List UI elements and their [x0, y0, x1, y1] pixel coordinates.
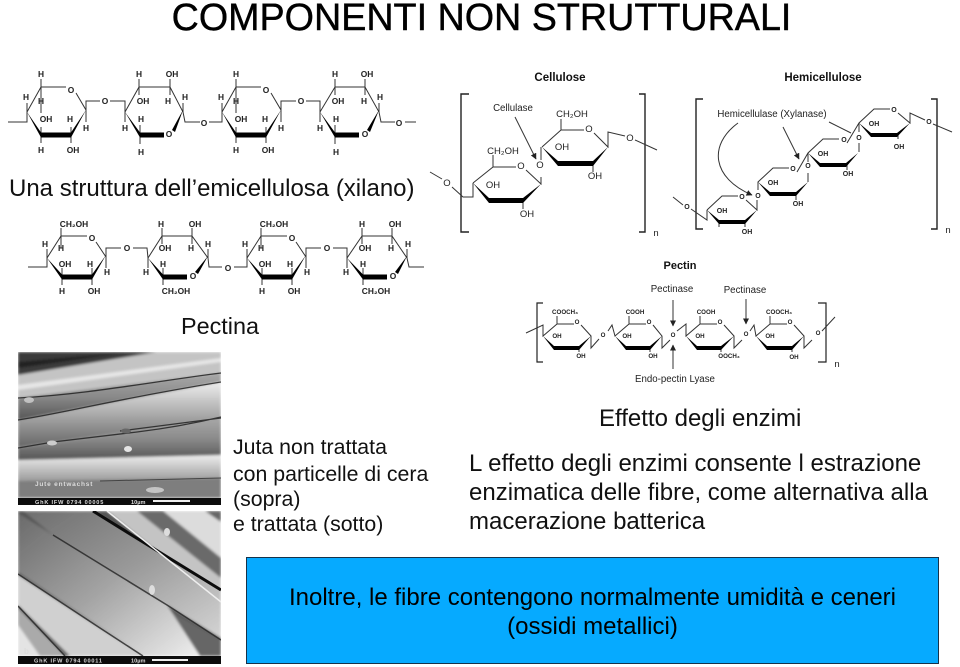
chemical structure: pectina chain: OH — [288, 286, 300, 296]
diagram: hemicellulose: O — [790, 166, 796, 173]
chemical structure: pectina chain: OH — [59, 259, 71, 269]
diagram: pectin: O — [671, 332, 676, 339]
chemical structure: xylan chain: H — [122, 123, 128, 133]
chemical structure: pectina chain: H — [287, 259, 293, 269]
chemical structure: xylan chain: O — [298, 96, 305, 106]
chemical structure: xylan chain: H — [38, 145, 44, 155]
chemical structure: pectina chain: CH₂OH — [162, 286, 190, 296]
chemical structure: pectina chain: H — [258, 243, 264, 253]
diagram: hemicellulose: OH — [869, 121, 879, 128]
chemical structure: pectina chain: H — [188, 243, 194, 253]
photo: jute treated — [18, 511, 221, 664]
diagram: pectin: OH — [576, 353, 586, 360]
chemical structure: pectina chain: CH₂OH — [362, 286, 390, 296]
diagram: pectin: OOCH₃ — [718, 353, 740, 360]
diagram: pectin: COOH — [626, 309, 645, 316]
text block: enzyme extraction: enzimatica delle fibre, come alternativa alla — [469, 479, 929, 506]
chemical structure: xylan chain: O — [166, 129, 173, 139]
diagram: hemicellulose: O — [755, 193, 761, 200]
caption: jute photos: (sopra) — [233, 487, 300, 511]
chemical structure: pectina chain: O — [89, 233, 96, 243]
chemical structure: xylan chain: H — [38, 69, 44, 79]
chemical structure: xylan chain: O — [396, 118, 403, 128]
chemical structure: pectina chain: OH — [88, 286, 100, 296]
chemical structure: pectina chain — [28, 219, 424, 296]
chemical structure: pectina chain: O — [289, 233, 296, 243]
caption: jute photos: e trattata (sotto) — [233, 512, 383, 536]
chemical structure: xylan chain: H — [83, 123, 89, 133]
diagram: pectin: Pectinase — [651, 284, 693, 295]
photo: jute untreated: Jute entwachst — [35, 481, 93, 488]
chemical structure: pectina chain: OH — [259, 259, 271, 269]
chemical structure: xylan chain: OH — [166, 69, 178, 79]
diagram: cellulose: O — [443, 178, 451, 189]
diagram: cellulose: OH — [555, 142, 569, 153]
caption: jute photos: Juta non trattata — [233, 435, 387, 459]
diagram: pectin: Pectin — [663, 260, 697, 272]
diagram: cellulose — [430, 72, 659, 239]
diagram: cellulose: O — [536, 160, 544, 171]
diagram: hemicellulose: OH — [793, 201, 803, 208]
diagram: cellulose: OH — [520, 209, 534, 220]
chemical structure: xylan chain: H — [278, 123, 284, 133]
heading: enzyme effect: Effetto degli enzimi — [599, 405, 801, 432]
diagram: cellulose: O — [585, 124, 593, 135]
diagram: hemicellulose: OH — [768, 180, 778, 187]
chemical structure: xylan chain: O — [263, 85, 270, 95]
diagram: hemicellulose: O — [841, 137, 847, 144]
photo: jute untreated: GhK IFW 0794 00005 — [35, 500, 104, 506]
chemical structure: xylan chain: H — [218, 92, 224, 102]
diagram: pectin: OH — [648, 353, 658, 360]
diagram: pectin: OH — [789, 354, 799, 361]
chemical structure: xylan chain: H — [332, 69, 338, 79]
chemical structure: pectina chain: H — [304, 267, 310, 277]
diagram: pectin: OH — [552, 333, 562, 340]
chemical structure: pectina chain: OH — [189, 219, 201, 229]
diagram: hemicellulose: O — [684, 204, 690, 211]
diagram: hemicellulose: O — [739, 194, 745, 201]
diagram: pectin: n — [834, 359, 840, 370]
diagram: pectin: COOH — [697, 309, 716, 316]
chemical structure: xylan chain: O — [102, 96, 109, 106]
diagram: pectin — [526, 260, 840, 385]
caption: xylan: Una struttura dell’emicellulosa (xilano) — [9, 175, 415, 202]
chemical structure: xylan chain: O — [201, 118, 208, 128]
chemical structure: pectina chain: O — [390, 271, 397, 281]
diagram: pectin: COOCH₃ — [766, 309, 792, 316]
chemical structure: xylan chain: O — [68, 85, 75, 95]
chemical structure: pectina chain: OH — [389, 219, 401, 229]
diagram: cellulose: n — [653, 228, 659, 239]
chemical structure: xylan chain: H — [38, 96, 44, 106]
chemical structure: pectina chain: H — [87, 259, 93, 269]
chemical structure: pectina chain: H — [405, 239, 411, 249]
chemical structure: pectina chain: H — [104, 267, 110, 277]
diagram: pectin: O — [718, 319, 723, 326]
callout: humidity and ash: Inoltre, le fibre contengono normalmente umidità e ceneri — [289, 584, 896, 611]
diagram: cellulose: Cellulose — [534, 72, 586, 84]
chemical structure: xylan chain: H — [165, 96, 171, 106]
diagram: hemicellulose: O — [856, 135, 862, 142]
diagram: hemicellulose: Hemicellulase (Xylanase) — [717, 109, 827, 120]
photo: jute untreated — [18, 352, 221, 506]
chemical structure: pectina chain: O — [124, 243, 131, 253]
diagram: pectin: O — [788, 319, 793, 326]
diagram: hemicellulose: O — [926, 119, 932, 126]
diagram: cellulose: O — [517, 161, 525, 172]
chemical structure: pectina chain: H — [242, 239, 248, 249]
diagram: hemicellulose: OH — [742, 229, 752, 236]
diagram: hemicellulose: Hemicellulose — [784, 72, 862, 84]
chemical structure: pectina chain: H — [59, 286, 65, 296]
text block: enzyme extraction: L effetto degli enzimi consente l estrazione — [469, 450, 921, 477]
diagram: cellulose: CH₂OH — [556, 109, 588, 120]
chemical structure: pectina chain: H — [388, 243, 394, 253]
chemical structure: xylan chain: H — [233, 145, 239, 155]
chemical structure: pectina chain: H — [360, 259, 366, 269]
photo: jute treated: b — [24, 647, 29, 656]
chemical structure: xylan chain: OH — [361, 69, 373, 79]
chemical structure: xylan chain: H — [333, 147, 339, 157]
diagram: cellulose: O — [626, 133, 634, 144]
chemical structure: xylan chain: H — [23, 92, 29, 102]
diagram: cellulose: Cellulase — [493, 103, 533, 114]
chemical structure: pectina chain: CH₂OH — [260, 219, 288, 229]
chemical structure: xylan chain: OH — [235, 114, 247, 124]
diagram: pectin: O — [601, 332, 606, 339]
diagram: pectin: COOCH₃ — [552, 309, 578, 316]
photo: jute treated: GhK IFW 0794 00011 — [34, 658, 103, 664]
chemical structure: xylan chain: H — [233, 96, 239, 106]
photo: jute treated: 10µm — [131, 658, 145, 664]
diagram: pectin: O — [816, 330, 821, 337]
text block: enzyme extraction — [469, 450, 929, 535]
chemical structure: pectina chain: H — [343, 267, 349, 277]
diagram: pectin: O — [575, 319, 580, 326]
chemical structure: xylan chain — [8, 69, 416, 157]
chemical structure: xylan chain: H — [136, 69, 142, 79]
chemical structure: xylan chain: H — [182, 92, 188, 102]
diagram: pectin: Endo-pectin Lyase — [635, 374, 715, 385]
chemical structure: pectina chain: H — [58, 243, 64, 253]
diagram: hemicellulose: O — [891, 107, 897, 114]
chemical structure: pectina chain: H — [259, 286, 265, 296]
chemical structure: pectina chain: H — [205, 239, 211, 249]
diagram: hemicellulose: O — [805, 163, 811, 170]
chemical structure: pectina chain: OH — [159, 243, 171, 253]
chemical structure: pectina chain: H — [42, 239, 48, 249]
chemical structure: pectina chain: H — [160, 259, 166, 269]
caption: pectina: Pectina — [181, 313, 260, 339]
chemical structure: xylan chain: OH — [262, 145, 274, 155]
chemical structure: pectina chain: H — [143, 267, 149, 277]
diagram: hemicellulose: n — [945, 225, 951, 236]
diagram: pectin: OH — [695, 333, 705, 340]
chemical structure: xylan chain: H — [377, 92, 383, 102]
chemical structure: xylan chain: H — [233, 69, 239, 79]
photo: jute untreated: 10µm — [131, 500, 145, 506]
chemical structure: xylan chain: OH — [137, 96, 149, 106]
chemical structure: pectina chain: CH₂OH — [60, 219, 88, 229]
callout: humidity and ash: (ossidi metallici) — [507, 613, 678, 640]
diagram: hemicellulose: OH — [843, 171, 853, 178]
chemical structure: pectina chain: H — [359, 219, 365, 229]
diagram: hemicellulose: OH — [818, 151, 828, 158]
diagram: pectin: O — [647, 319, 652, 326]
chemical structure: xylan chain: H — [67, 114, 73, 124]
caption: jute photos — [233, 435, 428, 536]
chemical structure: xylan chain: OH — [332, 96, 344, 106]
chemical structure: xylan chain: H — [333, 114, 339, 124]
diagram: cellulose: OH — [486, 180, 500, 191]
chemical structure: xylan chain: H — [138, 114, 144, 124]
diagram: hemicellulose: OH — [717, 208, 727, 215]
diagram: cellulose: OH — [588, 171, 602, 182]
callout: humidity and ash — [246, 558, 938, 664]
caption: jute photos: con particelle di cera — [233, 462, 428, 486]
chemical structure: xylan chain: H — [317, 123, 323, 133]
chemical structure: xylan chain: OH — [67, 145, 79, 155]
chemical structure: pectina chain: OH — [359, 243, 371, 253]
diagram: cellulose: CH₂OH — [487, 146, 519, 157]
chemical structure: xylan chain: O — [362, 129, 369, 139]
diagram: hemicellulose — [673, 72, 952, 236]
diagram: pectin: OH — [765, 333, 775, 340]
chemical structure: pectina chain: O — [324, 243, 331, 253]
chemical structure: xylan chain: OH — [40, 114, 52, 124]
diagram: hemicellulose: OH — [894, 144, 904, 151]
chemical structure: xylan chain: H — [138, 147, 144, 157]
diagram: pectin: Pectinase — [724, 285, 766, 296]
chemical structure: xylan chain: H — [262, 114, 268, 124]
diagram: pectin: OH — [622, 333, 632, 340]
chemical structure: pectina chain: H — [158, 219, 164, 229]
chemical structure: pectina chain: O — [225, 263, 232, 273]
diagram: pectin: O — [744, 331, 749, 338]
chemical structure: pectina chain: O — [190, 271, 197, 281]
text block: enzyme extraction: macerazione batterica — [469, 508, 706, 535]
chemical structure: xylan chain: H — [361, 96, 367, 106]
